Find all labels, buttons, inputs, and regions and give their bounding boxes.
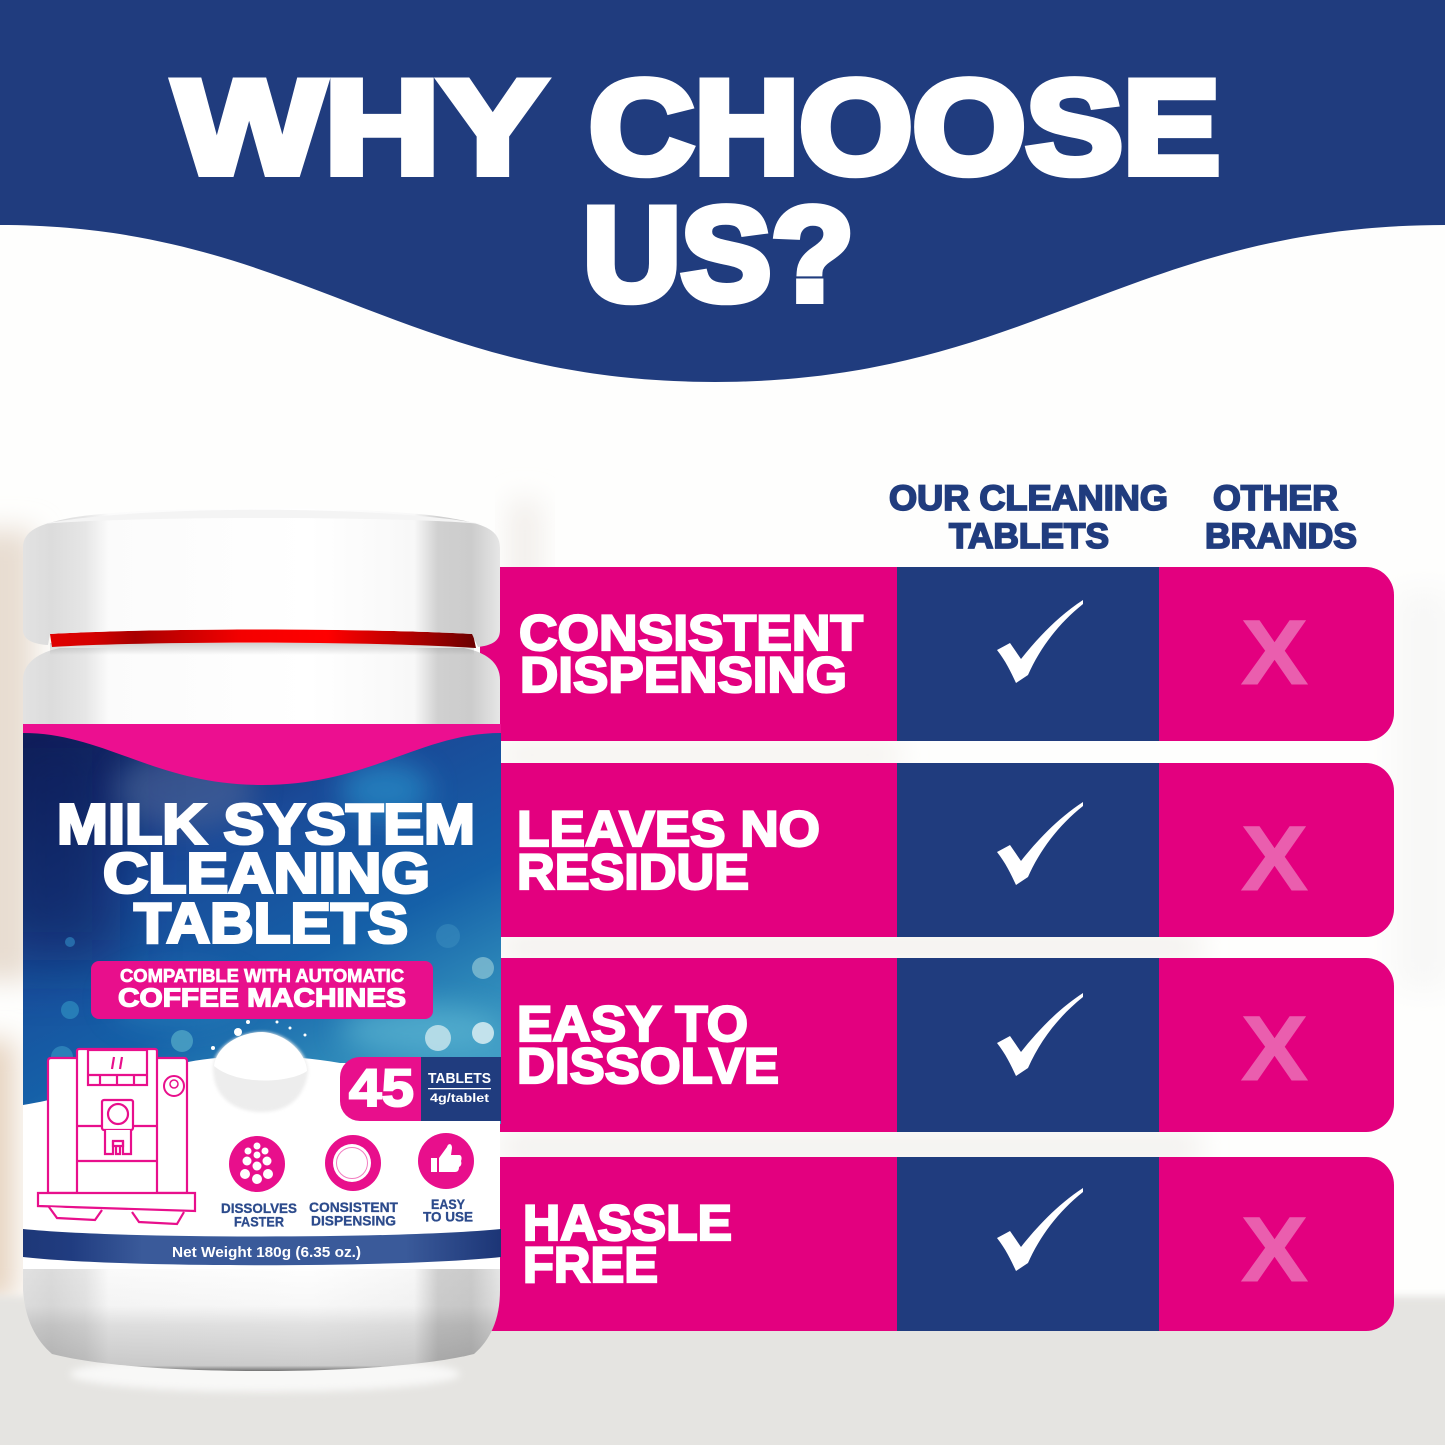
column headings [889, 479, 1357, 556]
title [174, 54, 1220, 329]
feature: easy to use: TO USE [423, 1208, 473, 1224]
x mark: X [1241, 1199, 1308, 1301]
feature: dissolves faster: FASTER [234, 1214, 284, 1230]
bokeh lights [51, 750, 500, 1068]
row label: FREE [523, 1237, 658, 1293]
label [0, 720, 501, 1269]
row label: CONSISTENT [519, 605, 863, 661]
row label: DISSOLVE [517, 1038, 779, 1094]
comparison row: leaves no residue [480, 763, 1394, 937]
comparison row: consistent dispensing [480, 567, 1394, 741]
net weight band: Net Weight 180g (6.35 oz.) [172, 1245, 361, 1261]
product name: CLEANING [103, 842, 430, 906]
row label [517, 801, 820, 900]
row label: EASY TO [517, 996, 748, 1052]
title: CHOOSE [589, 54, 1220, 202]
comparison row: easy to dissolve [480, 958, 1394, 1132]
row label: HASSLE [523, 1195, 732, 1251]
compatibility badge: COMPATIBLE WITH AUTOMATIC [120, 966, 404, 986]
title: WHY [174, 54, 546, 202]
feature: consistent dispensing: CONSISTENT [309, 1199, 398, 1215]
row label [523, 1195, 732, 1293]
product jar [0, 508, 501, 1392]
icon: tablet [211, 1020, 308, 1112]
product name [59, 802, 472, 944]
white lower area [23, 1056, 500, 1269]
row label: RESIDUE [517, 844, 749, 900]
row label [519, 605, 863, 703]
row label: LEAVES NO [517, 801, 820, 857]
x mark: X [1241, 808, 1308, 910]
compatibility badge [91, 961, 433, 1019]
column headings: TABLETS [949, 517, 1109, 556]
jar lid [23, 508, 500, 647]
title: US? [583, 181, 854, 329]
tablet count badge: 4g/tablet [430, 1091, 489, 1105]
column headings: OTHER [1213, 479, 1338, 518]
row label: DISPENSING [520, 647, 847, 703]
check icon [997, 802, 1083, 885]
feature: dissolves faster: DISSOLVES [221, 1200, 297, 1216]
tablet count badge: TABLETS [428, 1071, 491, 1087]
icon: coffee machine [38, 1049, 195, 1224]
product name: TABLETS [134, 892, 408, 956]
feature: consistent dispensing: DISPENSING [311, 1212, 396, 1228]
floor reflection [70, 1356, 460, 1392]
feature: easy to use [418, 1133, 474, 1224]
top pink wave [23, 724, 501, 785]
net weight band [23, 1229, 501, 1265]
feature: consistent dispensing [309, 1135, 398, 1228]
x mark: X [1241, 602, 1308, 704]
comparison row: hassle free [480, 1157, 1394, 1331]
check icon [997, 600, 1083, 683]
column headings: OUR CLEANING [889, 479, 1168, 518]
check icon [997, 993, 1083, 1076]
compatibility badge: COFFEE MACHINES [118, 982, 406, 1012]
jar body [23, 643, 500, 1371]
tablet count badge: 45 [349, 1059, 414, 1118]
row label [517, 996, 779, 1094]
x mark: X [1241, 998, 1308, 1100]
feature: easy to use: EASY [431, 1196, 466, 1212]
product name: MILK SYSTEM [57, 792, 475, 856]
feature: dissolves faster [221, 1136, 297, 1230]
column headings: BRANDS [1205, 517, 1357, 556]
red seal [50, 630, 476, 648]
check icon [997, 1188, 1083, 1271]
tablet count badge [340, 1057, 501, 1121]
lid top highlight [42, 510, 482, 524]
header banner [0, 0, 1445, 382]
